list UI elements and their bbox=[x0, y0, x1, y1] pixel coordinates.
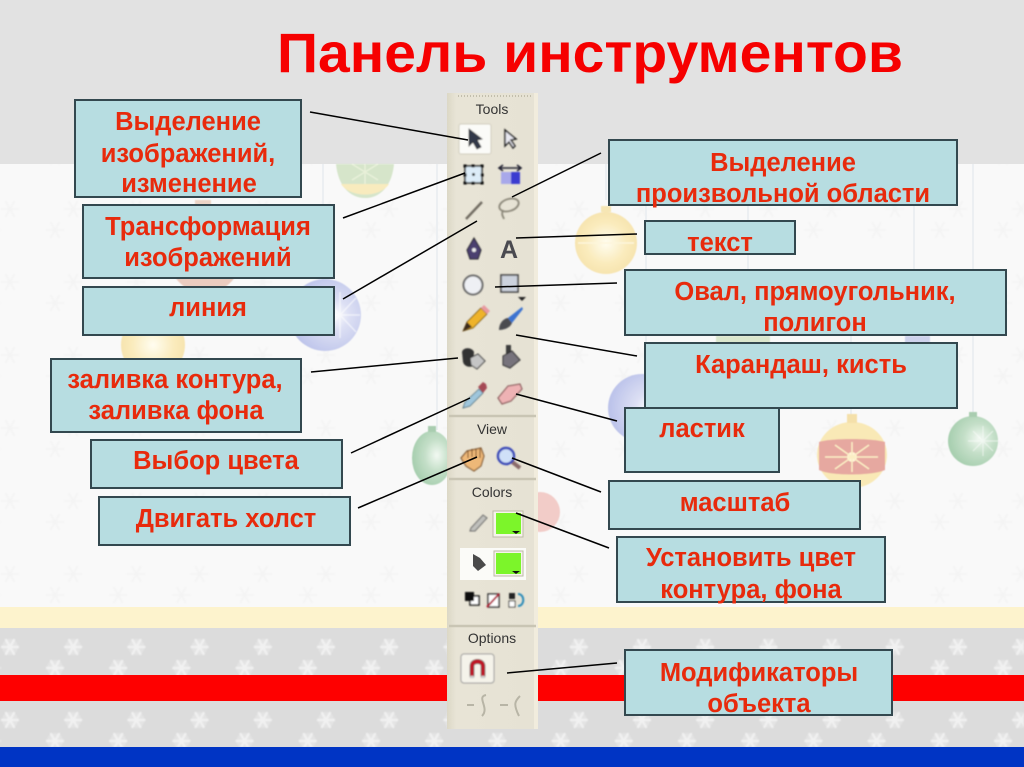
callout: fill: заливка контура, bbox=[67, 366, 283, 394]
heading: Colors: Colors bbox=[472, 484, 512, 500]
callout: shapes: полигон bbox=[763, 309, 867, 337]
callout: colors bbox=[617, 537, 885, 604]
callout: color pick: Выбор цвета bbox=[133, 447, 300, 475]
callout: text: текст bbox=[687, 229, 753, 257]
callout: line: линия bbox=[169, 294, 247, 322]
icon: lasso bbox=[498, 196, 520, 219]
icon: stroke pencil bbox=[470, 515, 487, 531]
callout: zoom bbox=[609, 481, 860, 529]
icon: swap colors bbox=[509, 593, 523, 607]
callout: fill: заливка фона bbox=[88, 397, 264, 425]
callout: pencil and brush: Карандаш, кисть bbox=[695, 351, 907, 379]
icon: no color bbox=[487, 594, 499, 607]
title: Панель инструментов bbox=[277, 21, 903, 84]
callout: eraser bbox=[625, 408, 779, 472]
callout: shapes bbox=[625, 270, 1006, 337]
callout: hand bbox=[99, 497, 350, 545]
background: footer bands bbox=[0, 607, 1024, 767]
callout: modifiers: Модификаторы bbox=[660, 659, 858, 687]
callout: selection: изображений, bbox=[101, 140, 275, 168]
callout: line bbox=[83, 287, 334, 335]
icon: paint bucket bbox=[503, 345, 520, 368]
callout: color pick bbox=[91, 440, 342, 488]
leader lines bbox=[310, 112, 637, 673]
panel: tools palette bbox=[447, 93, 538, 729]
callout: selection: Выделение bbox=[115, 108, 261, 136]
callout: colors: контура, фона bbox=[660, 576, 843, 604]
heading: View: View bbox=[477, 421, 508, 437]
icon: eyedropper bbox=[463, 382, 487, 408]
callout: lasso bbox=[609, 140, 957, 208]
icon: smooth bbox=[467, 695, 486, 716]
callout: selection bbox=[75, 100, 301, 198]
icon: magnifier bbox=[498, 448, 520, 468]
icon: stroke swatch bbox=[493, 511, 523, 537]
callout: transform: Трансформация bbox=[105, 213, 311, 241]
icon: free transform bbox=[465, 166, 482, 183]
icon: brush bbox=[499, 307, 523, 330]
callout: pencil and brush bbox=[645, 343, 957, 408]
icon: magnet bbox=[461, 654, 494, 683]
callout: hand: Двигать холст bbox=[136, 505, 316, 533]
icon: selected arrow bbox=[459, 124, 491, 154]
callout: colors: Установить цвет bbox=[646, 544, 856, 572]
icon: oval bbox=[464, 276, 482, 294]
icon: line bbox=[466, 202, 482, 219]
callout: text bbox=[645, 221, 795, 257]
icon: pencil bbox=[463, 305, 490, 331]
icon: subselect arrow bbox=[505, 130, 516, 148]
heading: Tools: Tools bbox=[476, 101, 508, 117]
callout: shapes: Овал, прямоугольник, bbox=[674, 278, 956, 306]
callout: transform: изображений bbox=[124, 244, 292, 272]
icon: pen bbox=[467, 238, 481, 259]
callout: eraser: ластик bbox=[659, 415, 745, 443]
icon: rectangle bbox=[501, 275, 526, 301]
callout: zoom: масштаб bbox=[680, 489, 790, 517]
callout: fill bbox=[51, 359, 301, 432]
callout: lasso: Выделение bbox=[710, 149, 856, 177]
callout: selection: изменение bbox=[121, 170, 257, 198]
icon: ink bottle bbox=[462, 348, 485, 369]
callout: transform bbox=[83, 205, 334, 278]
background: header band bbox=[0, 0, 1024, 164]
icon: hand bbox=[461, 448, 484, 471]
icon: straighten bbox=[500, 696, 520, 716]
icon: text tool: A bbox=[500, 236, 518, 264]
icon: gradient transform bbox=[499, 165, 521, 184]
icon: eraser bbox=[498, 384, 522, 404]
heading: Options: Options bbox=[468, 630, 516, 646]
callout: modifiers: объекта bbox=[707, 690, 811, 718]
ornaments bbox=[121, 164, 998, 532]
icon: fill swatch row bbox=[460, 548, 526, 580]
icon: black and white bbox=[465, 592, 479, 605]
callout: modifiers bbox=[625, 650, 892, 718]
callout: lasso: произвольной области bbox=[636, 180, 930, 208]
